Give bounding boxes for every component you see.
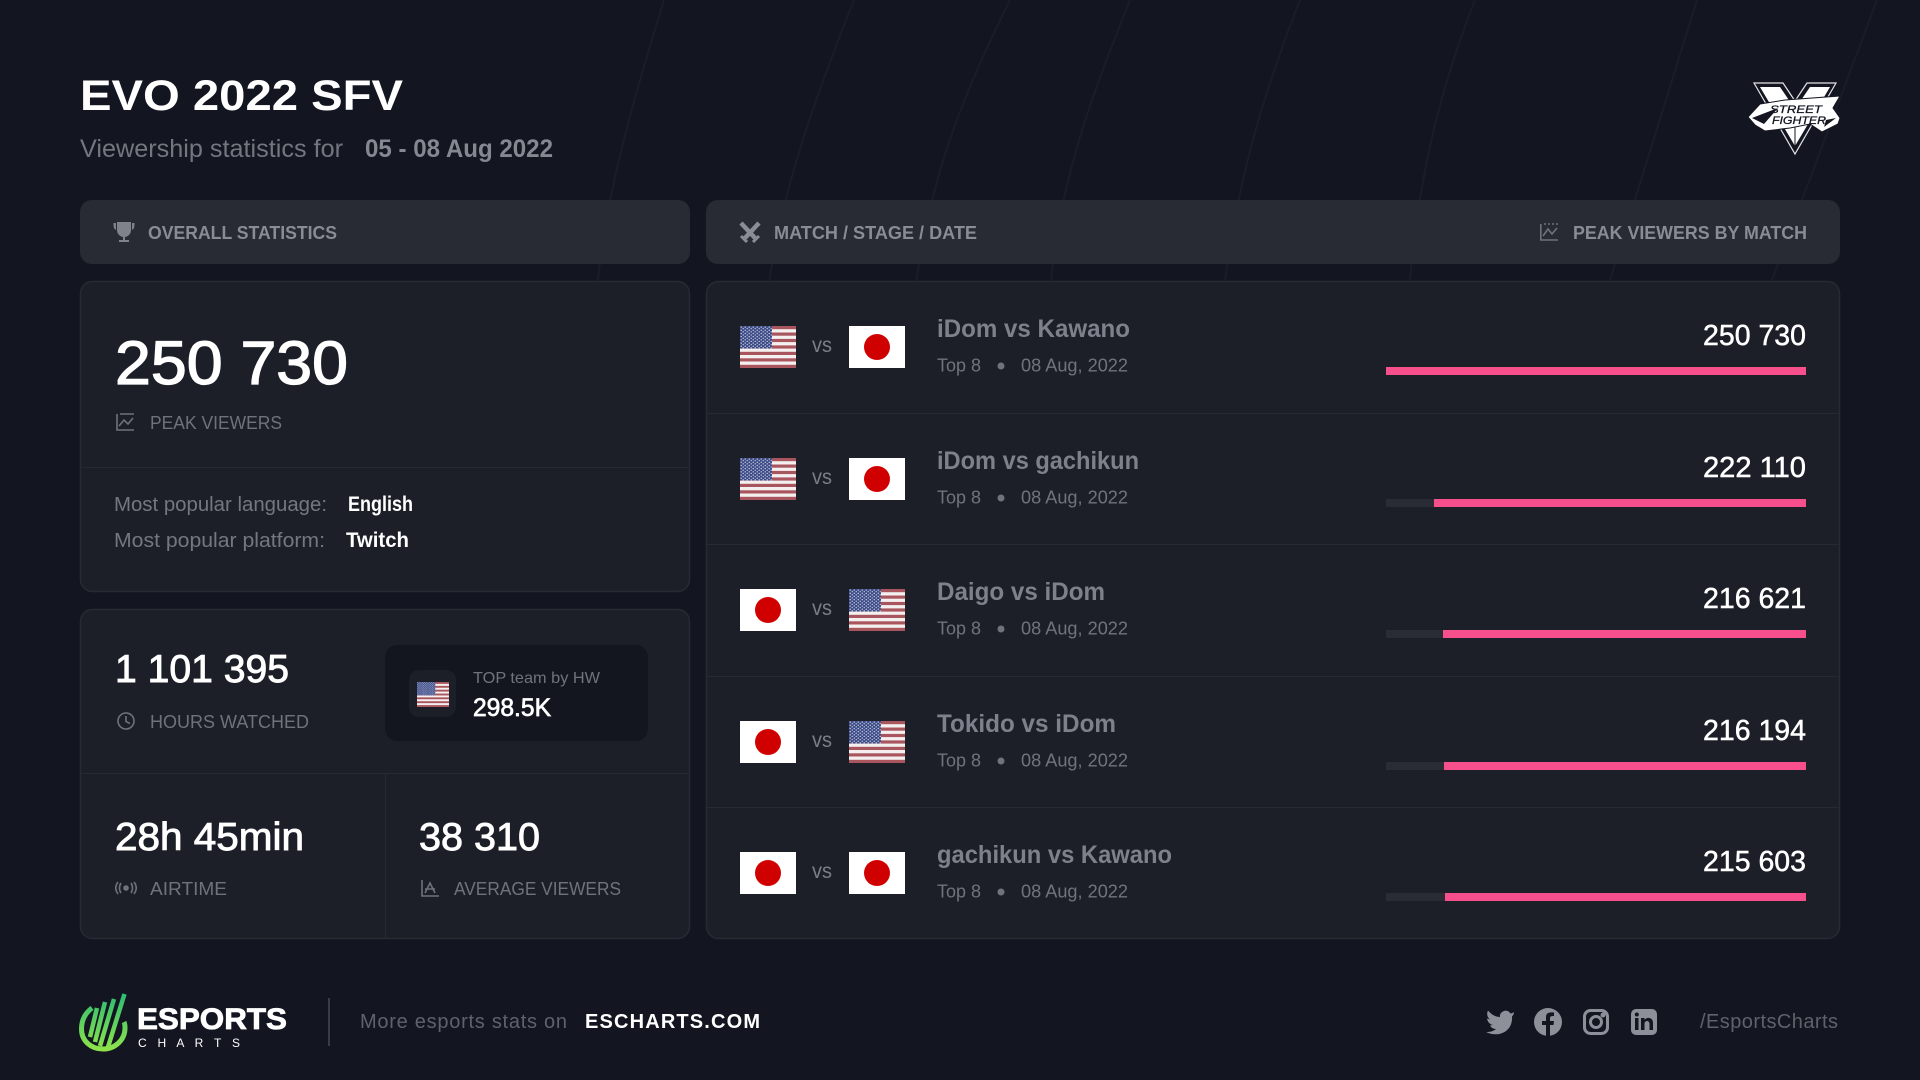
stat: average viewers: 38 310 <box>419 816 540 859</box>
row: iDom vs Kawano: Top 8 <box>937 356 981 376</box>
game logo: Street Fighter V: FIGHTER <box>1772 115 1826 127</box>
row: iDom vs Kawano <box>740 315 1806 376</box>
icon: logo mark <box>82 994 125 1049</box>
row: Tokido vs iDom: Tokido vs iDom <box>937 710 1116 738</box>
footer text: more stats: ESCHARTS.COM <box>585 1011 760 1033</box>
header: overall statistics: OVERALL STATISTICS <box>148 223 337 243</box>
stat: peak viewers <box>115 329 348 433</box>
game logo: Street Fighter V <box>1748 83 1840 154</box>
row: Tokido vs iDom: Top 8 <box>937 750 981 770</box>
row: Tokido vs iDom: 216 194 <box>1703 715 1806 747</box>
row: iDom vs gachikun: Top 8 <box>937 488 981 508</box>
subtitle <box>80 135 553 163</box>
callout: top team by hours watched: TOP team by HW <box>473 670 601 687</box>
footer text: more stats: More esports stats on <box>360 1011 567 1033</box>
row: iDom vs gachikun: 222 110 <box>1703 452 1806 484</box>
icon: crossed swords <box>741 223 759 242</box>
panel: matches <box>706 282 1840 938</box>
row: Tokido vs iDom: 08 Aug, 2022 <box>1021 750 1128 770</box>
text: most popular platform: Twitch <box>346 529 409 552</box>
header: matches <box>706 200 1840 264</box>
title: EVO 2022 SFV <box>80 72 403 120</box>
panel: secondary stats <box>80 610 690 938</box>
stat: peak viewers: PEAK VIEWERS <box>150 413 282 433</box>
row: iDom vs gachikun <box>740 447 1806 508</box>
footer text: handle: /EsportsCharts <box>1700 1011 1838 1033</box>
subtitle: 05 - 08 Aug 2022 <box>365 135 553 163</box>
text: most popular platform: Most popular platform: <box>114 530 325 552</box>
row: Daigo vs iDom: vs <box>812 597 832 620</box>
footer divider <box>328 998 330 1046</box>
row: Daigo vs iDom: Daigo vs iDom <box>937 578 1105 606</box>
row: Daigo vs iDom: 216 621 <box>1703 583 1806 615</box>
row: gachikun vs Kawano: 215 603 <box>1703 846 1806 878</box>
header: matches: PEAK VIEWERS BY MATCH <box>1573 223 1807 243</box>
stat: airtime <box>115 816 304 899</box>
row: iDom vs gachikun: iDom vs gachikun <box>937 447 1139 475</box>
row: iDom vs Kawano: iDom vs Kawano <box>937 315 1130 343</box>
row: gachikun vs Kawano: vs <box>812 860 832 883</box>
text: most popular platform <box>114 529 409 552</box>
icon: trophy <box>114 222 134 242</box>
row: Tokido vs iDom <box>740 710 1806 770</box>
footer text: more stats <box>360 1011 760 1033</box>
row: Tokido vs iDom: vs <box>812 729 832 752</box>
social icons <box>1486 1008 1657 1036</box>
row: gachikun vs Kawano: Top 8 <box>937 882 981 902</box>
stat: hours watched: 1 101 395 <box>115 648 289 691</box>
row: gachikun vs Kawano: gachikun vs Kawano <box>937 841 1172 869</box>
callout: top team by hours watched <box>385 645 648 741</box>
icon: linkedin <box>1631 1009 1657 1035</box>
footer logo: Esports Charts: C H A R T S <box>138 1036 240 1050</box>
stat: average viewers: AVERAGE VIEWERS <box>454 879 621 899</box>
icon: twitter <box>1486 1010 1514 1034</box>
row: gachikun vs Kawano <box>740 841 1806 902</box>
row: iDom vs Kawano: vs <box>812 334 832 357</box>
row: Daigo vs iDom: Top 8 <box>937 618 981 638</box>
icon: peak chart <box>1541 224 1558 240</box>
text: most popular language: English <box>348 493 413 516</box>
stat: airtime: AIRTIME <box>150 879 227 899</box>
footer logo: Esports Charts: ESPORTS <box>137 1003 287 1036</box>
row: iDom vs gachikun: vs <box>812 466 832 489</box>
row: Daigo vs iDom <box>740 578 1806 638</box>
row: iDom vs gachikun: 08 Aug, 2022 <box>1021 488 1128 508</box>
row: iDom vs Kawano: 08 Aug, 2022 <box>1021 356 1128 376</box>
footer logo: Esports Charts <box>82 994 287 1050</box>
callout: top team by hours watched: 298.5K <box>473 694 551 722</box>
stat: peak viewers: 250 730 <box>115 329 348 397</box>
icon: facebook <box>1534 1008 1562 1036</box>
stat: hours watched <box>115 648 309 732</box>
panel: peak viewers <box>80 282 690 592</box>
header: overall statistics <box>80 200 690 264</box>
stat: hours watched: HOURS WATCHED <box>150 712 309 732</box>
header: matches: MATCH / STAGE / DATE <box>774 223 977 243</box>
row: Daigo vs iDom: 08 Aug, 2022 <box>1021 618 1128 638</box>
stat: average viewers <box>419 816 621 899</box>
text: most popular language: Most popular language: <box>114 494 327 516</box>
text: most popular language <box>114 493 413 516</box>
row: gachikun vs Kawano: 08 Aug, 2022 <box>1021 882 1128 902</box>
stat: airtime: 28h 45min <box>115 816 304 859</box>
subtitle: Viewership statistics for <box>80 135 343 163</box>
game logo: Street Fighter V: STREET <box>1770 104 1824 116</box>
icon: instagram <box>1584 1010 1608 1034</box>
row: iDom vs Kawano: 250 730 <box>1703 320 1806 352</box>
